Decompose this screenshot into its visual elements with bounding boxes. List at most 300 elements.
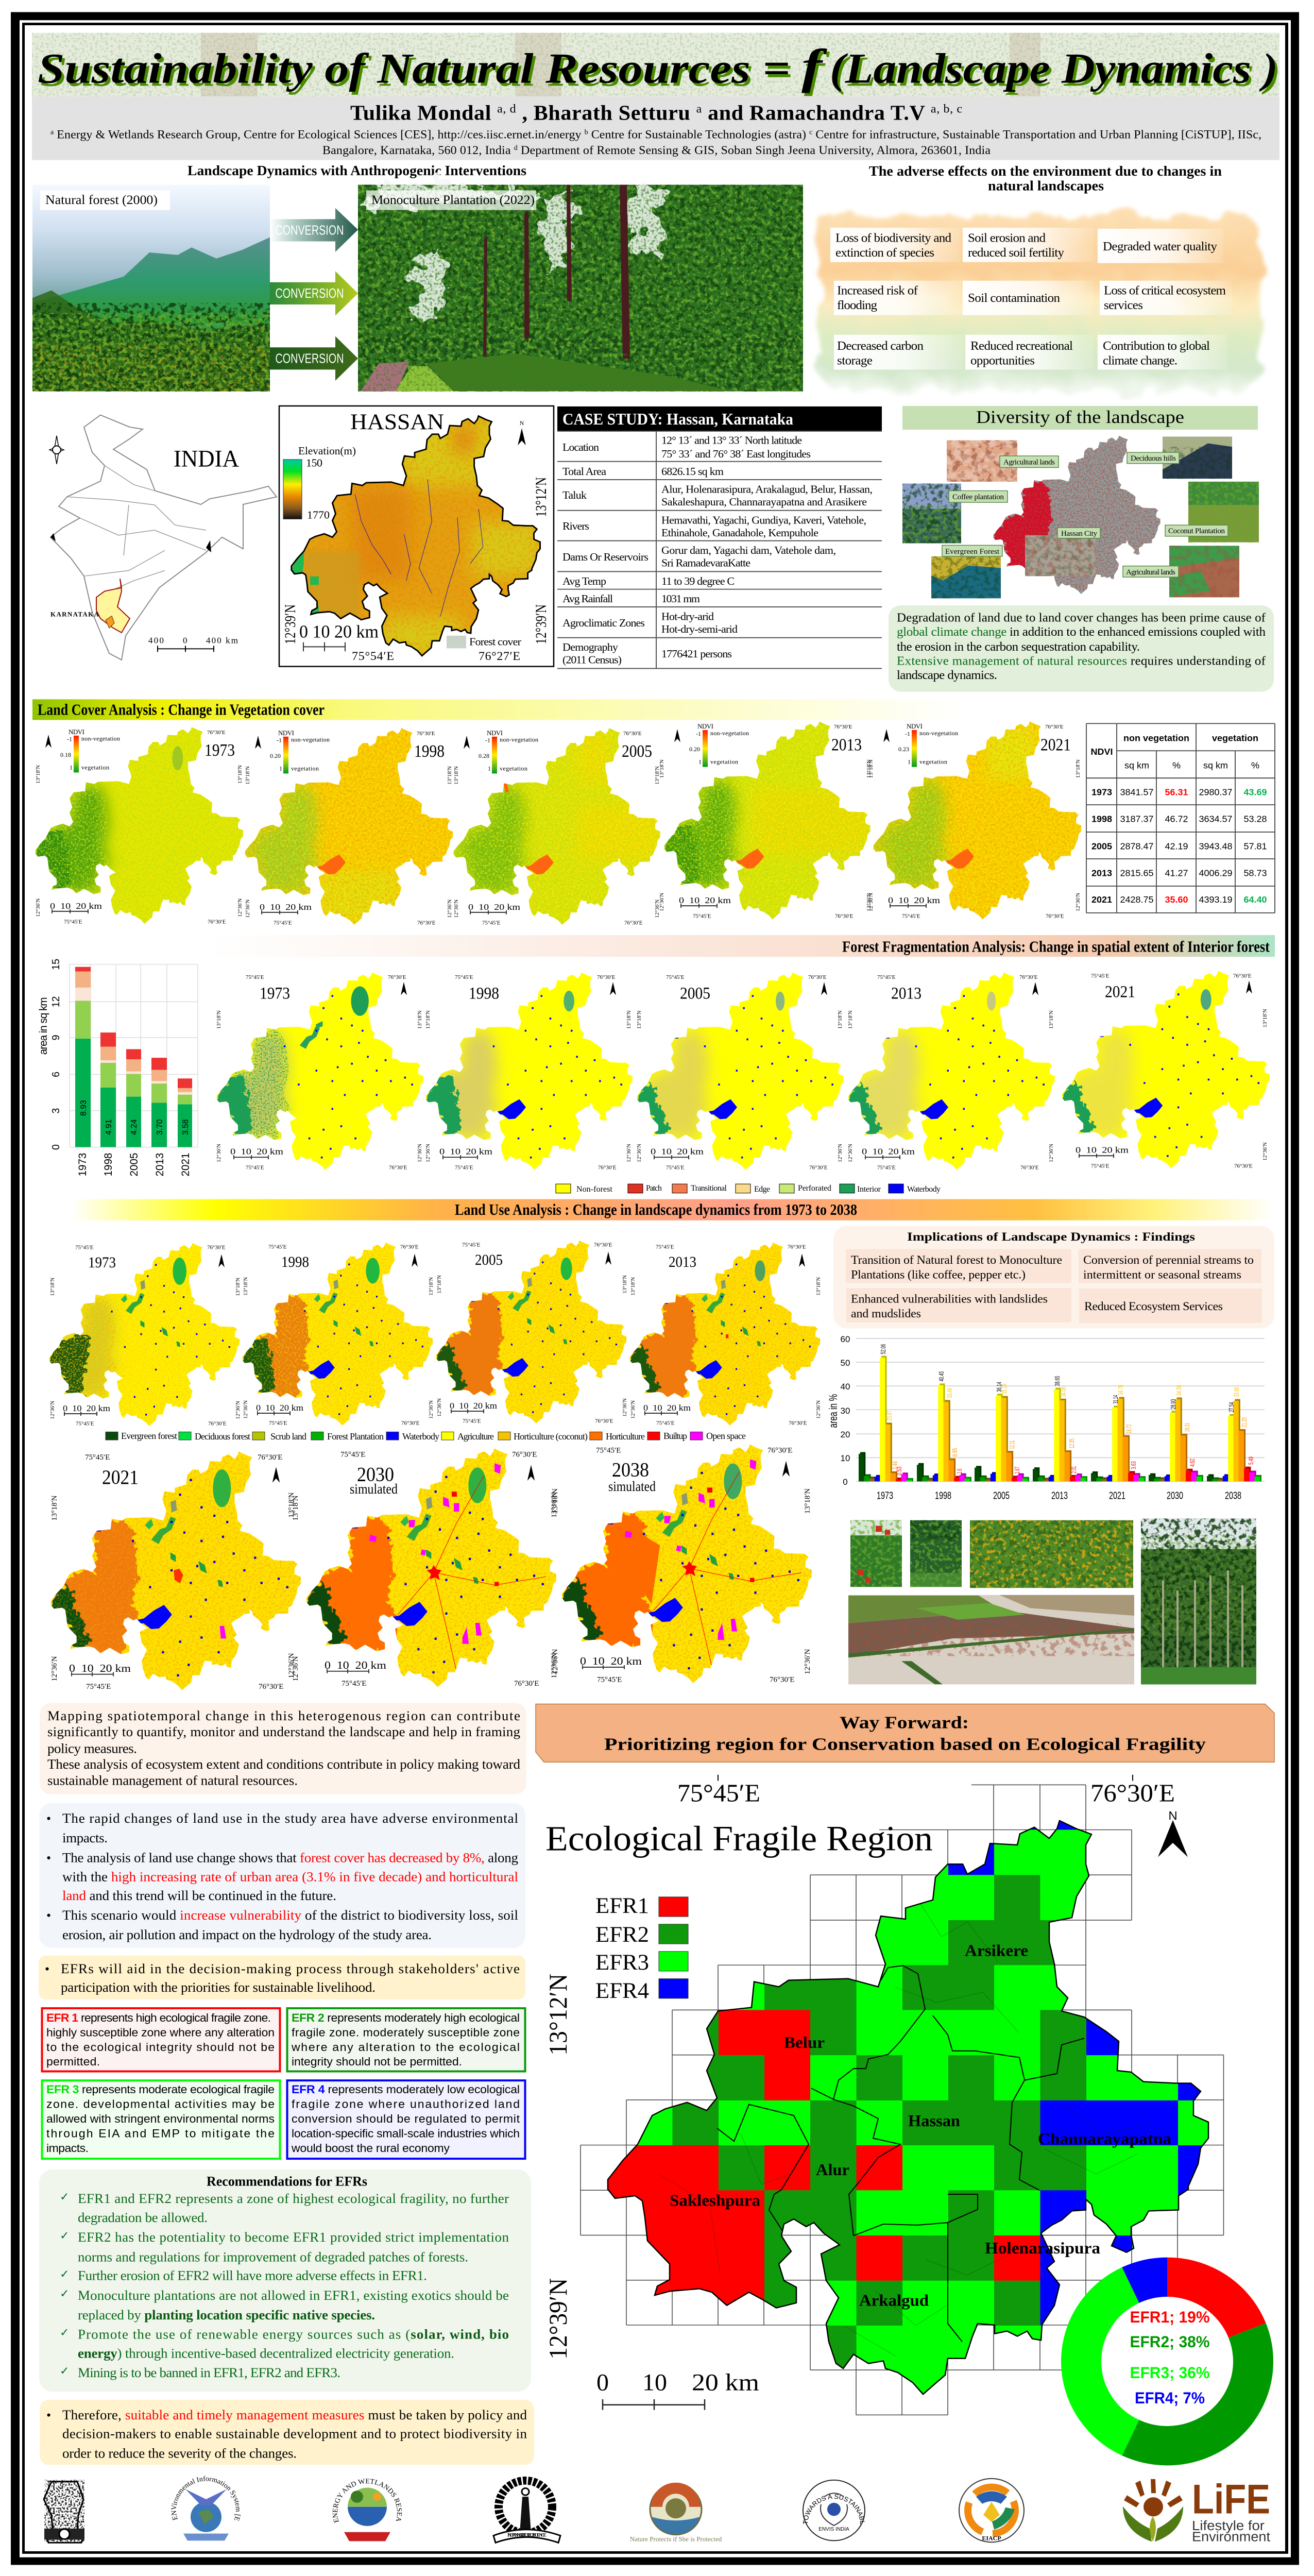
NDVI legend 1973 — [45, 728, 120, 772]
graticule labels: 13°18′N — [216, 1010, 222, 1029]
panel: diversity map and photos: Hassan City — [1061, 530, 1098, 538]
scale bar: 0 10 20 km — [260, 902, 312, 912]
row: taluk: Alur, Holenarasipura, Arakalagud, Belur, Hassan, — [661, 483, 873, 495]
graticule labels: 13°18′N — [436, 1275, 442, 1294]
graticule labels — [868, 724, 1081, 920]
graticule labels: 75°45′E — [274, 920, 292, 926]
bullets — [46, 1811, 51, 1923]
map: fragmentation 2021 — [1062, 971, 1270, 1170]
table: NDVI statistics: % — [1172, 760, 1181, 771]
scale bar — [679, 895, 731, 908]
north arrow — [605, 1251, 611, 1265]
bar value labels: 5.49 — [1247, 1456, 1255, 1465]
graticule labels: 75°45′E — [85, 1453, 110, 1462]
NDVI legend 2005: vegetation — [500, 765, 527, 772]
graticule labels: 12°36′N — [1262, 1142, 1268, 1161]
logo: ENVIS India: TOWARDS A SUSTAINABLE ENVIRONMENT — [803, 2494, 865, 2524]
box: EFR 3: through EIA and EMP to mitigate the — [46, 2127, 275, 2140]
bar value labels — [879, 1344, 1255, 1476]
axis labels: 3 — [50, 1108, 62, 1113]
longitude labels: 75°45′E — [677, 1779, 760, 1807]
graticule labels: 76°30′E — [623, 731, 642, 737]
table: case study — [557, 406, 882, 669]
effect: biodiversity — [830, 228, 960, 262]
heading: land cover analysis — [32, 699, 1275, 720]
box: EFR 3: allowed with stringent environmental norms — [46, 2112, 275, 2125]
NDVI legend 2013: 0.20 — [689, 745, 700, 753]
table: NDVI statistics — [1086, 723, 1275, 913]
authors: and Ramachandra T.V — [702, 101, 930, 124]
taluk labels: Sakleshpura — [670, 2192, 760, 2210]
compass — [49, 436, 64, 464]
scale bar — [50, 901, 102, 913]
graticule labels: 76°30′E — [512, 1450, 537, 1459]
logo: EIACP — [959, 2479, 1024, 2542]
table: NDVI statistics: 46.72 — [1165, 814, 1188, 824]
recommendation lines: Mining is to be banned in EFR1, EFR2 and EFR3. — [78, 2365, 340, 2380]
north arrow — [1246, 980, 1252, 994]
graticule labels: 13°18′N — [866, 759, 872, 778]
NDVI legend 2005 — [464, 730, 538, 773]
value labels: 4.91 — [105, 1119, 113, 1135]
NDVI legend 2005: -1 — [485, 737, 490, 744]
row: agroclimatic: Hot-dry-semi-arid — [661, 623, 738, 635]
bar value labels: 52.06 — [879, 1344, 887, 1354]
taluk boundaries — [717, 1965, 1084, 2342]
finding: landslides: and mudslides — [851, 1307, 921, 1320]
text block: land degradation: global climate change in addition to the enhanced emissions coupled with — [897, 625, 1266, 639]
effect: carbon — [834, 335, 963, 369]
year: 2013 — [669, 1254, 696, 1270]
photo: evergreen forest — [931, 556, 1001, 598]
NDVI legend 2021: NDVI — [907, 723, 923, 730]
authors and affiliations — [32, 96, 1279, 160]
finding: streams: Conversion of perennial streams to — [1083, 1253, 1254, 1267]
legend: land use — [106, 1431, 746, 1442]
logo: EIACP: EIACP — [982, 2535, 1001, 2541]
logo: Indian Institute of Science: INDIAN INSTITUTE OF SCIENCE — [507, 2533, 547, 2538]
village boundaries — [658, 1896, 1153, 2356]
logo: ENVIS Sahyadri: ENVironmental Information System [ENVIS] Sahyadri — [171, 2476, 241, 2521]
text block: land degradation — [889, 605, 1274, 692]
axis labels: 6 — [50, 1072, 62, 1077]
legend: land use: Waterbody — [402, 1431, 439, 1442]
north arrow — [527, 1465, 535, 1481]
scale — [299, 621, 379, 651]
graticule labels: 75°45′E — [877, 974, 896, 980]
taluk labels — [670, 1942, 1171, 2310]
text block: land use impacts — [39, 1803, 525, 1948]
effect: biodiversity: Loss of biodiversity and — [835, 231, 952, 245]
graticule labels: 12°36′N — [837, 1144, 843, 1162]
table: NDVI statistics: 3187.37 — [1120, 814, 1154, 824]
bars 2013 — [1033, 1388, 1087, 1481]
heading: landscape dynamics: Landscape Dynamics with Anthropogenic Interventions — [187, 162, 526, 178]
bar value labels: 21.25 — [1240, 1417, 1248, 1427]
scale bar: 0 10 20 km — [1076, 1145, 1129, 1155]
bar value labels: 18.72 — [1125, 1425, 1133, 1433]
logo: LiFE — [1123, 2477, 1270, 2544]
photo: paddy field — [848, 1595, 1134, 1684]
graticule labels: 76°30′E — [789, 1420, 807, 1427]
scale bar: 400 km — [206, 636, 238, 645]
bar 2021 — [178, 1078, 192, 1147]
text block: mapping: These analysis of ecosystem extent and conditions contribute in policy making toward — [47, 1756, 521, 1772]
callouts — [942, 452, 1228, 577]
heading: forest fragmentation — [206, 935, 1275, 957]
label: INDIA: INDIA — [174, 446, 239, 472]
authors: a, b, c — [931, 103, 962, 115]
graticule labels — [216, 974, 423, 1171]
map: ecological fragile regions — [544, 1775, 1224, 2415]
box: EFR 2: integrity should not be permitted. — [292, 2055, 462, 2068]
row: rivers: Hemavathi, Yagachi, Gundiya, Kaveri, Vatehole, — [661, 514, 866, 526]
graticule labels: 76°30′E — [207, 730, 226, 736]
scale bar — [596, 2369, 759, 2410]
graticule labels: 76°30′E — [258, 1453, 282, 1462]
NDVI legend 1973: 0.18 — [60, 751, 71, 758]
photo: coconut plantation — [1188, 482, 1259, 543]
bar value labels: 0.53 — [895, 1467, 903, 1476]
NDVI legend 1998: vegetation — [291, 765, 319, 772]
logo: ENVIS India: ENVIS INDIA — [818, 2527, 849, 2532]
map: NDVI 2021 — [868, 721, 1081, 920]
bar value labels: 35.18 — [1000, 1384, 1008, 1394]
graticule labels: 75°45′E — [75, 1245, 94, 1251]
north arrow — [610, 982, 616, 995]
graticule labels: 12°36′N — [1075, 893, 1081, 911]
year: 2021 — [102, 1466, 139, 1488]
legend: land use: Open space — [706, 1431, 746, 1441]
year: 1973 — [88, 1255, 116, 1271]
finding: streams: intermittent or seasonal streams — [1083, 1268, 1241, 1281]
graticule labels: 76°30′E — [417, 731, 435, 737]
title banner — [32, 33, 1279, 96]
legend: EFR classes: EFR4 — [595, 1978, 649, 2003]
graticule labels: 75°45′E — [86, 1683, 111, 1691]
row: agroclimatic: Hot-dry-arid — [661, 611, 714, 622]
authors: a, d — [497, 103, 516, 115]
axis labels: 2005 — [128, 1153, 140, 1176]
finding: transition: Plantations (like coffee, pepper etc.) — [851, 1268, 1026, 1281]
graticule labels — [436, 1242, 628, 1425]
graticule labels: 76°30′E — [835, 913, 854, 920]
donut labels: EFR1; 19% — [1130, 2308, 1210, 2326]
north arrow — [412, 1253, 418, 1267]
box: EFR 3: zone. developmental activities may be — [46, 2097, 275, 2110]
graticule labels: 76°30′E — [767, 1447, 792, 1454]
legend: land use: Forest Plantation — [327, 1431, 384, 1442]
graticule labels: 12°36′N — [1048, 1144, 1054, 1162]
table: NDVI statistics: 3841.57 — [1120, 787, 1154, 797]
axis labels — [38, 959, 192, 1176]
graticule labels: 12°36′N — [453, 900, 459, 918]
effect: carbon: storage — [837, 354, 873, 368]
bar value labels: 28.93 — [1169, 1399, 1177, 1409]
table: NDVI statistics: sq km — [1124, 760, 1149, 771]
panel: recommendations for EFRs — [39, 2170, 531, 2392]
box: EFR 1: EFR 1 represents high ecological fragile zone. — [46, 2011, 271, 2024]
finding: ecosystem services: Reduced Ecosystem Services — [1084, 1300, 1223, 1313]
arrow: conversion 2 — [270, 271, 358, 316]
table: case study: CASE STUDY: Hassan, Karnataka — [562, 410, 793, 428]
graticule labels: 12°36′N — [237, 899, 243, 917]
axis labels: 1998 — [935, 1490, 951, 1502]
donut labels: EFR3; 36% — [1130, 2363, 1210, 2382]
graticule labels — [453, 731, 660, 926]
scale bar — [651, 1146, 704, 1159]
bullets: • — [46, 1908, 51, 1923]
NDVI legend 1998: non-vegetation — [291, 736, 330, 743]
box: EFR 4: EFR 4 represents moderately low ecological — [292, 2082, 520, 2096]
simulated note: simulated — [608, 1478, 656, 1494]
year: 1998 — [469, 985, 499, 1003]
graticule labels: 12°36′N — [287, 1653, 296, 1679]
map: land use 2038 simulated — [551, 1445, 812, 1684]
NDVI legend 2021: 0.23 — [898, 745, 909, 753]
row: location: Location — [562, 441, 599, 453]
graticule labels: 12°36′N — [447, 900, 453, 918]
axis labels: 50 — [841, 1358, 850, 1368]
affiliations: d — [514, 144, 518, 151]
graticule labels: 12°36′N — [436, 1398, 442, 1417]
bars 1998 — [917, 1383, 971, 1481]
graticule labels: 76°30′E — [809, 1165, 828, 1171]
north arrow — [1032, 982, 1038, 995]
box: EFR 4: would boost the rural economy — [291, 2141, 450, 2155]
row: rainfall: 1031 mm — [661, 592, 700, 605]
authors: a — [696, 103, 702, 115]
scale bar: 0 10 20 km — [439, 1146, 492, 1156]
scale bar: 20 km — [692, 2369, 759, 2396]
scale bar: 0 10 20 km — [325, 1659, 386, 1671]
finding: streams — [1079, 1249, 1261, 1283]
latitude labels — [544, 1974, 572, 2360]
table: NDVI statistics: 35.60 — [1165, 894, 1188, 905]
north arrow — [401, 982, 407, 995]
text block: mapping: sustainable management of natural resources. — [47, 1773, 298, 1788]
axis labels: 1973 — [877, 1490, 893, 1502]
row: rivers: Ethinahole, Ganadahole, Kempuhole — [661, 527, 818, 539]
bar value labels: 1.67 — [1013, 1467, 1021, 1474]
table: NDVI statistics: 4006.29 — [1199, 868, 1233, 878]
scale bar: 0 10 20 km — [450, 1401, 497, 1411]
table: NDVI statistics: NDVI — [1091, 747, 1113, 757]
affiliations: Centre for Sustainable Technologies (astra) — [588, 128, 809, 141]
scale bar: 0 10 20 km — [580, 1655, 642, 1667]
forest cover key — [447, 636, 522, 648]
map: land use 2021 — [50, 1452, 301, 1691]
scale bar: 0 10 20 km — [888, 895, 940, 905]
legend: land use: Scrub land — [270, 1431, 306, 1442]
logo: ENVIS Sahyadri — [171, 2476, 241, 2541]
table: NDVI statistics: 57.81 — [1243, 841, 1267, 851]
recommendation lines: replaced by planting location specific native species. — [78, 2307, 375, 2323]
false colour map — [993, 436, 1161, 594]
graticule labels: 12°36′N — [804, 1649, 812, 1674]
elevation legend: Elevation(m) — [298, 445, 356, 457]
latitude labels: 12°39′N — [544, 2278, 572, 2360]
scale bar: 10 — [642, 2369, 667, 2396]
recommendation lines: EFR1 and EFR2 represents a zone of highest ecological fragility, no further — [78, 2191, 509, 2206]
graticule labels: 13°18′N — [1048, 1010, 1054, 1029]
scale bar: 0 10 20 km — [256, 1403, 303, 1413]
graticule labels: 75°45′E — [269, 1420, 287, 1427]
graticule labels: 13°18′N — [50, 1495, 59, 1521]
axis labels: 9 — [50, 1035, 62, 1040]
north arrow — [272, 1467, 280, 1483]
bar value labels: 31.14 — [1112, 1395, 1119, 1403]
recommendation lines: EFR2 has the potentiality to become EFR1 provided strict implementation — [78, 2229, 509, 2245]
graticule labels: 12°36′N — [550, 1653, 558, 1679]
legend: land use: Horticulture (coconut) — [514, 1431, 588, 1442]
graticule labels: 75°45′E — [902, 913, 920, 920]
elevation legend — [283, 445, 356, 521]
graticule labels: 13°18′N — [659, 759, 665, 778]
graticule labels: 75°45′E — [1091, 1163, 1110, 1170]
affiliations: b — [585, 128, 588, 136]
text block: mapping: Mapping spatiotemporal change in this heterogenous region can contribute — [47, 1708, 520, 1723]
graticule labels: 76°30′E — [598, 1165, 617, 1171]
graticule labels: 13°18′N — [1075, 759, 1081, 778]
scale bar: 0 10 20 km — [862, 1146, 915, 1156]
taluk labels: Alur — [816, 2161, 849, 2179]
year 1998: 1998 — [414, 742, 445, 761]
row: location — [562, 434, 811, 460]
photo: pomegranate — [850, 1520, 902, 1587]
graticule labels: 76°30′E — [770, 1676, 794, 1684]
bar value labels: 2.01 — [1070, 1466, 1078, 1473]
label: Karnataka: KARNATAKA — [50, 611, 99, 618]
graticule labels: 76°30′E — [1233, 973, 1252, 979]
effect: biodiversity: extinction of species — [835, 246, 934, 260]
authors: Tulika Mondal — [350, 101, 491, 124]
graticule labels: 13°18′N — [636, 1010, 642, 1029]
bar value labels: 12.11 — [1008, 1440, 1016, 1449]
north arrow — [821, 982, 827, 995]
scale bar — [862, 1146, 915, 1159]
map: land use 2030 simulated — [287, 1449, 558, 1688]
logo: national emblem — [44, 2480, 84, 2543]
graticule labels: 12°36′N — [243, 1400, 249, 1419]
row: temperature: 11 to 39 degree C — [661, 575, 735, 587]
elevation legend: 150 — [306, 457, 322, 469]
text block: land use impacts: land and this trend will be continued in the future. — [62, 1888, 336, 1903]
scale bar: 400 — [148, 636, 164, 645]
finding: landslides: Enhanced vulnerabilities with landslides — [851, 1293, 1048, 1306]
title: ecological fragile region: Ecological Fragile Region — [545, 1819, 933, 1858]
row: rivers: Rivers — [562, 520, 589, 532]
value labels: 4.24 — [130, 1119, 139, 1135]
legend: land use: Horticulture — [606, 1431, 645, 1442]
NDVI legend 2005: non-vegetation — [500, 736, 538, 743]
panel: diversity map and photos: Agricultural lands — [1003, 459, 1055, 467]
recommendation lines — [78, 2191, 509, 2380]
chart: land use area percent 3D bars — [827, 1334, 1265, 1502]
legend: land use: Deciduous forest — [195, 1431, 250, 1442]
graticule labels: 76°30′E — [389, 1165, 407, 1171]
graticule labels: 75°45′E — [666, 974, 685, 980]
row: dams: Sri RamadevaraKatte — [661, 557, 750, 569]
scale bar — [439, 1146, 492, 1159]
axis labels: 2013 — [1051, 1490, 1068, 1502]
row: dams — [562, 544, 836, 569]
axis labels: 1973 — [77, 1153, 89, 1176]
row: location: 12° 13´ and 13° 33´ North latitude — [661, 434, 802, 446]
panel: findings — [833, 1226, 1274, 1328]
table: NDVI statistics: 53.28 — [1243, 814, 1267, 824]
NDVI legend 1998: NDVI — [278, 730, 294, 737]
legend: EFR classes — [595, 1894, 688, 2003]
box: EFR 2 — [287, 2008, 525, 2071]
effect: flooding — [834, 281, 963, 315]
graticule labels: 75°45′E — [463, 1418, 481, 1425]
row: total area: 6826.15 sq km — [661, 465, 724, 478]
bar value labels: 36.14 — [995, 1382, 1003, 1392]
north arrow: N — [520, 419, 524, 427]
graticule labels: 13°18′N — [447, 766, 453, 785]
graticule labels — [287, 1450, 558, 1688]
effect: climate: climate change. — [1103, 354, 1178, 368]
base EFR3 — [607, 1821, 1208, 2394]
table: NDVI statistics: % — [1251, 760, 1259, 771]
row: taluk: Taluk — [562, 489, 587, 501]
scale bar: 0 10 20 km — [643, 1403, 691, 1413]
title: Sustainability of Natural Resources = — [38, 45, 790, 92]
graticule labels: 76°30′E — [208, 1421, 227, 1427]
row: dams: Gorur dam, Yagachi dam, Vatehole dam, — [661, 544, 836, 556]
panel: diversity map and photos: Evergreen Forest — [945, 548, 1000, 556]
row: temperature — [562, 575, 735, 587]
heading: way forward — [536, 1704, 1274, 1762]
effect: recreation — [965, 335, 1094, 369]
graticule labels: 76°30′E — [417, 920, 436, 926]
text block: management measures: • — [46, 2408, 51, 2422]
table: NDVI statistics: 3634.57 — [1199, 814, 1233, 824]
map: fragmentation 2005 — [636, 972, 844, 1171]
text block: EFR decision-making — [39, 1956, 525, 1999]
axis labels: 20 — [841, 1430, 850, 1439]
title: (Landscape Dynamics ) — [830, 45, 1278, 92]
box: EFR 4: location-specific small-scale industries which — [292, 2127, 520, 2140]
legend: EFR classes: EFR1 — [595, 1894, 649, 1918]
graticule labels: 75°45′E — [340, 1450, 365, 1459]
graticule labels: 13°18′N — [815, 1277, 822, 1296]
panel: adverse effects — [819, 215, 1262, 392]
scale bar: 0 — [183, 636, 187, 645]
EFR1 cells — [581, 2010, 1040, 2326]
axis labels: 40 — [841, 1382, 850, 1392]
bars 2030 — [1149, 1397, 1203, 1481]
year 2005: 2005 — [622, 742, 652, 761]
graticule labels — [35, 730, 243, 925]
box: EFR 1: to the ecological integrity should not be — [46, 2040, 275, 2054]
panel: diversity map and photos: Agricultural lands — [1126, 568, 1175, 577]
logo: Ministry of Environment — [630, 2483, 722, 2543]
axis labels: 2030 — [1167, 1490, 1183, 1502]
donut labels — [1130, 2308, 1209, 2407]
row: location: 75° 33´ and 76° 38´ East longitudes — [661, 448, 811, 460]
photo: Hassan city — [1025, 535, 1096, 576]
photo: agricultural lands 2 — [1169, 546, 1239, 597]
NDVI legend 1973: NDVI — [69, 728, 84, 736]
graticule labels: 13°18′N — [654, 766, 660, 785]
graticule labels: 76°30′E — [514, 1680, 539, 1688]
text block: mapping: significantly to quantify, monitor and understand the landscape and help in framing — [47, 1724, 520, 1739]
graticule labels: 76°30′E — [1019, 974, 1038, 980]
graticule labels — [245, 731, 453, 926]
arrow: conversion 3: CONVERSION — [275, 352, 344, 366]
